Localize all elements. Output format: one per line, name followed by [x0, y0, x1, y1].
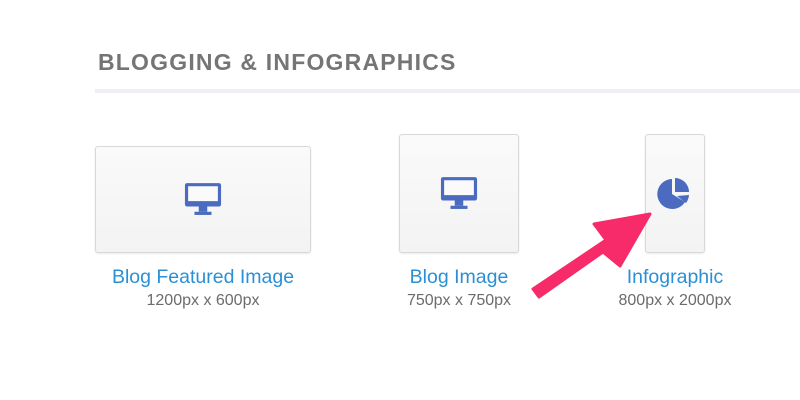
size: 750x750: 750px x 750px: [407, 292, 511, 309]
size: 800x2000: 800px x 2000px: [618, 292, 731, 309]
panel: blog image: [399, 134, 519, 253]
title: BLOGGING & INFOGRAPHICS: [98, 49, 457, 75]
size: 1200x600: 1200px x 600px: [146, 292, 259, 309]
icon: monitor: [184, 183, 222, 215]
icon: monitor: [440, 177, 478, 209]
panel: blog featured image: [95, 146, 311, 253]
panel: infographic: [645, 134, 705, 253]
icon: pie chart: [657, 178, 689, 209]
label: infographic: Infographic: [627, 266, 723, 288]
label: blog image: Blog Image: [410, 266, 508, 288]
label: blog featured image: Blog Featured Image: [112, 266, 294, 288]
